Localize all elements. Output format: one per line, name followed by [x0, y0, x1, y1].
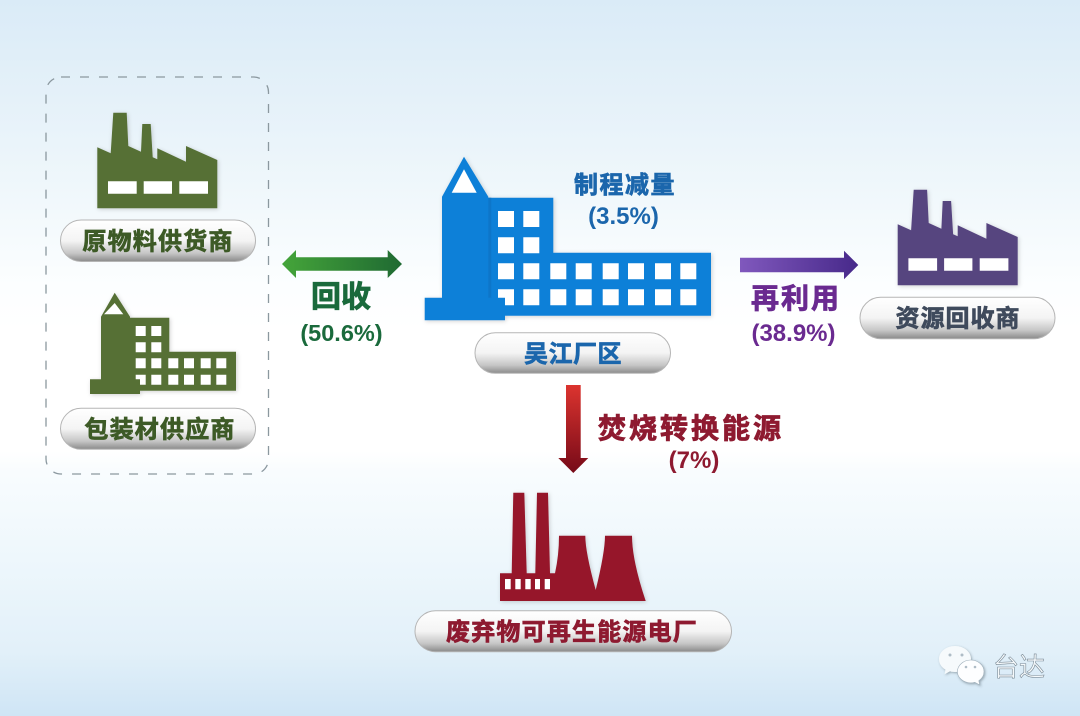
text: reuse share: (38.9%) [751, 320, 836, 347]
icon: Wujiang plant building [425, 157, 711, 320]
label: waste-to-energy plant: 废弃物可再生能源电厂 [446, 618, 698, 646]
arrow: incineration [558, 385, 588, 473]
icon: WeChat logo [939, 646, 984, 685]
label: packaging supplier [60, 408, 256, 449]
icon: waste-to-energy plant [500, 493, 646, 601]
text: reuse share: 再利用 [751, 283, 841, 314]
text: incineration to energy share: 焚烧转换能源 [598, 413, 784, 444]
text: WeChat account name: 台达 [993, 652, 1045, 682]
icon: packaging supplier building [90, 293, 236, 394]
panel: suppliers dashed box [46, 77, 268, 474]
icon: raw material supplier factory [97, 113, 217, 208]
label: waste-to-energy plant [415, 611, 732, 652]
text: recycle share: 回收 [311, 281, 371, 314]
text: reuse share [751, 283, 841, 347]
label: Wujiang plant: 吴江厂区 [524, 341, 622, 368]
label: packaging supplier: 包装材供应商 [84, 416, 236, 444]
label: raw material supplier: 原物料供货商 [82, 228, 234, 256]
text: process reduction: (3.5%) [588, 203, 659, 230]
label: resource recycler [860, 297, 1055, 339]
text: recycle share [300, 281, 383, 346]
text: incineration to energy share: (7%) [669, 447, 719, 474]
icon: resource recycler factory [898, 190, 1018, 285]
arrow: recycle two-way [282, 250, 402, 278]
text: process reduction: 制程减量 [574, 172, 676, 199]
arrow: reuse [740, 251, 858, 279]
text: recycle share: (50.6%) [300, 320, 383, 346]
label: raw material supplier [60, 220, 256, 262]
label: resource recycler: 资源回收商 [896, 306, 1020, 332]
text: incineration to energy share [598, 413, 784, 474]
text: process reduction [574, 172, 676, 230]
label: Wujiang plant [475, 333, 670, 373]
